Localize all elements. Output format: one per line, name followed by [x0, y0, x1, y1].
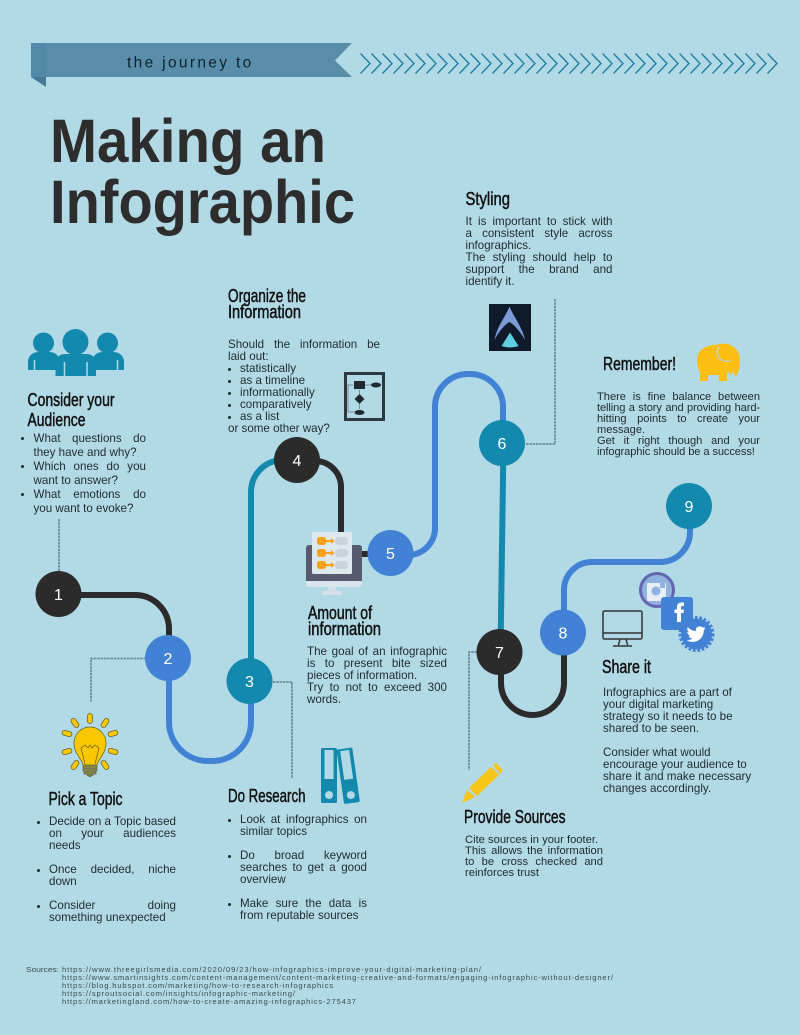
- heading: organize the information: [228, 285, 306, 322]
- text: pick a topic bullets: on your audiences: [49, 827, 176, 840]
- text: amount body: Try to not to exceed 300: [307, 681, 447, 694]
- text: styling body: identify it.: [466, 275, 514, 288]
- icon: binders: [321, 747, 360, 804]
- step 2: [145, 635, 191, 681]
- step 3: [226, 658, 272, 704]
- connector: step 2 to bulb: [91, 658, 146, 702]
- heading: provide sources: Provide Sources: [464, 806, 566, 827]
- text: sources body: reinforces trust: [465, 867, 539, 879]
- sources footer: [26, 965, 614, 1006]
- icon: elephant ear: [717, 347, 731, 361]
- text: audience questions: want to answer?: [34, 474, 118, 487]
- text: amount body: is to present bite sized: [307, 657, 447, 670]
- icon: audience people: [28, 329, 124, 376]
- text: share body: encourage your audience to: [603, 758, 747, 771]
- text: share body: changes accordingly.: [603, 782, 711, 795]
- text: sources body: This allows the information: [465, 845, 603, 857]
- text: research bullets: searches to get a good: [240, 861, 367, 874]
- title: Infographic: [50, 168, 355, 236]
- text: sources body: to be cross checked and: [465, 856, 603, 868]
- sources footer: https://www.threegirlsmedia.com/2020/09/23/how-infographics-improve-your-digital-marketing-plan/: [62, 965, 482, 974]
- heading: consider your audience: Audience: [28, 409, 86, 430]
- text: research bullets: [228, 813, 367, 922]
- text: organize options: informationally: [240, 386, 315, 398]
- path segment 4 to 5: [297, 461, 391, 554]
- icon: brand logo: [489, 304, 531, 351]
- text: pick a topic bullets: something unexpected: [49, 911, 166, 924]
- step 6: [479, 420, 525, 466]
- connector: step 6 to styling: [526, 299, 555, 444]
- text: audience questions: What questions do: [34, 432, 146, 445]
- step 4: [274, 437, 320, 483]
- heading: amount of information: Amount of: [308, 602, 373, 623]
- step 1: 1: [54, 587, 63, 604]
- heading: organize the information: Information: [228, 301, 301, 322]
- text: organize options: statistically: [240, 362, 296, 374]
- text: styling body: The styling should help to: [466, 251, 612, 264]
- text: pick a topic bullets: Consider doing: [49, 899, 176, 912]
- text: share body: share it and make necessary: [603, 770, 751, 783]
- heading: amount of information: [308, 602, 381, 639]
- path segment 1 to 2: [58, 595, 169, 658]
- text: remember body: [597, 391, 760, 458]
- text: pick a topic bullets: Once decided, niche: [49, 863, 176, 876]
- heading: consider your audience: [28, 389, 114, 430]
- icon: monitor with list: [306, 532, 362, 595]
- text: remember body: hitting points to create your: [597, 413, 760, 425]
- text: styling body: a consistent style across: [466, 227, 612, 240]
- path segment 3 to 4: [251, 460, 297, 681]
- heading: consider your audience: Consider your: [28, 389, 114, 410]
- step 6: 6: [498, 436, 507, 453]
- text: organize options: laid out:: [228, 350, 269, 362]
- text: amount body: [307, 645, 447, 706]
- text: research bullets: Look at infographics on: [240, 813, 367, 826]
- text: styling body: infographics.: [466, 239, 531, 252]
- text: remember body: Get it right though and your: [597, 435, 760, 447]
- chevron arrows strip: [360, 53, 778, 74]
- heading: amount of information: information: [308, 618, 381, 639]
- connector: step 7 to sources: [469, 652, 477, 770]
- text: organize options: as a timeline: [240, 374, 305, 386]
- text: research bullets: overview: [240, 873, 286, 886]
- text: share body: Infographics are a part of: [603, 686, 732, 699]
- text: research bullets: from reputable sources: [240, 909, 359, 922]
- heading: pick a topic: Pick a Topic: [48, 788, 122, 809]
- heading: styling: Styling: [466, 188, 510, 209]
- text: share body: Consider what would: [603, 746, 711, 759]
- text: amount body: pieces of information.: [307, 669, 417, 682]
- icon: desktop monitor: [603, 611, 642, 646]
- step 9: [666, 483, 712, 529]
- heading: share it: Share it: [602, 656, 651, 677]
- text: share body: strategy so it needs to be: [603, 710, 733, 723]
- connector: step 3 to research: [273, 682, 292, 778]
- step 8: [540, 610, 586, 656]
- text: audience questions: they have and why?: [34, 446, 137, 459]
- step 3: 3: [245, 674, 254, 691]
- text: audience questions: Which ones do you: [34, 460, 146, 473]
- text: research bullets: similar topics: [240, 825, 307, 838]
- sources footer: https://www.smartinsights.com/content-management/content-marketing-creative-and-formats/engaging-infographic-without-designer/: [62, 973, 614, 982]
- text: amount body: The goal of an infographic: [307, 645, 447, 658]
- path segment 8 to 9: [564, 506, 690, 632]
- step 5: 5: [386, 546, 395, 563]
- text: organize options: as a list: [240, 410, 279, 422]
- heading: remember: Remember!: [603, 353, 676, 374]
- title: [50, 107, 355, 236]
- sources footer: https://marketingland.com/how-to-create-amazing-infographics-275437: [62, 997, 356, 1006]
- icon: light bulb: [62, 714, 118, 777]
- step 7: 7: [495, 645, 504, 662]
- step 8: 8: [559, 626, 568, 642]
- text: share body: your digital marketing: [603, 698, 713, 711]
- step 1: [36, 571, 82, 617]
- text: research bullets: Make sure the data is: [240, 897, 367, 910]
- text: pick a topic bullets: needs: [49, 839, 81, 852]
- icon: flowchart: [346, 374, 384, 420]
- text: remember body: telling a story and providing hard-: [597, 402, 760, 414]
- text: pick a topic bullets: Decide on a Topic based: [49, 815, 176, 828]
- text: styling body: It is important to stick with: [466, 215, 612, 228]
- text: organize options: Should the information be: [228, 338, 380, 350]
- text: organize options: [228, 338, 380, 434]
- text: styling body: [466, 215, 612, 288]
- text: styling body: support the brand and: [466, 263, 612, 276]
- connector: step 1 to text: [58, 519, 60, 572]
- text: pick a topic bullets: [37, 815, 176, 924]
- text: remember body: message.: [597, 424, 645, 436]
- path segment 7 to 8: [501, 632, 564, 715]
- path segment 6 to 7: [500, 443, 504, 652]
- sources footer: https://sproutsocial.com/insights/infographic-marketing/: [62, 989, 296, 998]
- heading: do research: Do Research: [228, 785, 306, 806]
- text: share body: [603, 686, 752, 795]
- icon: twitter badge: [681, 618, 712, 650]
- text: organize options: or some other way?: [228, 422, 330, 434]
- heading: organize the information: Organize the: [228, 285, 306, 306]
- text: audience questions: [21, 432, 146, 515]
- text: research bullets: Do broad keyword: [240, 849, 367, 862]
- text: remember body: infographic should be a success!: [597, 446, 755, 458]
- sources footer: https://blog.hubspot.com/marketing/how-to-research-infographics: [62, 981, 333, 990]
- text: audience questions: you want to evoke?: [34, 502, 133, 515]
- icon: elephant: [697, 344, 740, 381]
- icon: pencil: [462, 763, 502, 803]
- step 2: 2: [164, 651, 173, 668]
- step 4: 4: [293, 453, 302, 470]
- text: amount body: words.: [307, 693, 341, 706]
- icon: facebook: [661, 597, 693, 630]
- step 7: [476, 629, 522, 675]
- text: pick a topic bullets: down: [49, 875, 77, 888]
- banner text: the journey to: [127, 54, 253, 72]
- icon: instagram: [640, 574, 674, 606]
- sources footer: Sources:: [26, 965, 59, 974]
- path segment 5 to 6: [391, 374, 503, 555]
- step 5: [368, 530, 414, 576]
- text: organize options: comparatively: [240, 398, 312, 410]
- text: audience questions: What emotions do: [34, 488, 146, 501]
- path segment 2 to 3: [169, 658, 251, 761]
- text: remember body: There is fine balance between: [597, 391, 760, 403]
- title: Making an: [50, 107, 326, 175]
- text: sources body: [465, 834, 603, 879]
- step 9: 9: [685, 499, 694, 516]
- text: share body: shared to be seen.: [603, 722, 699, 735]
- text: sources body: Cite sources in your footer.: [465, 834, 598, 846]
- banner ribbon: [31, 43, 352, 87]
